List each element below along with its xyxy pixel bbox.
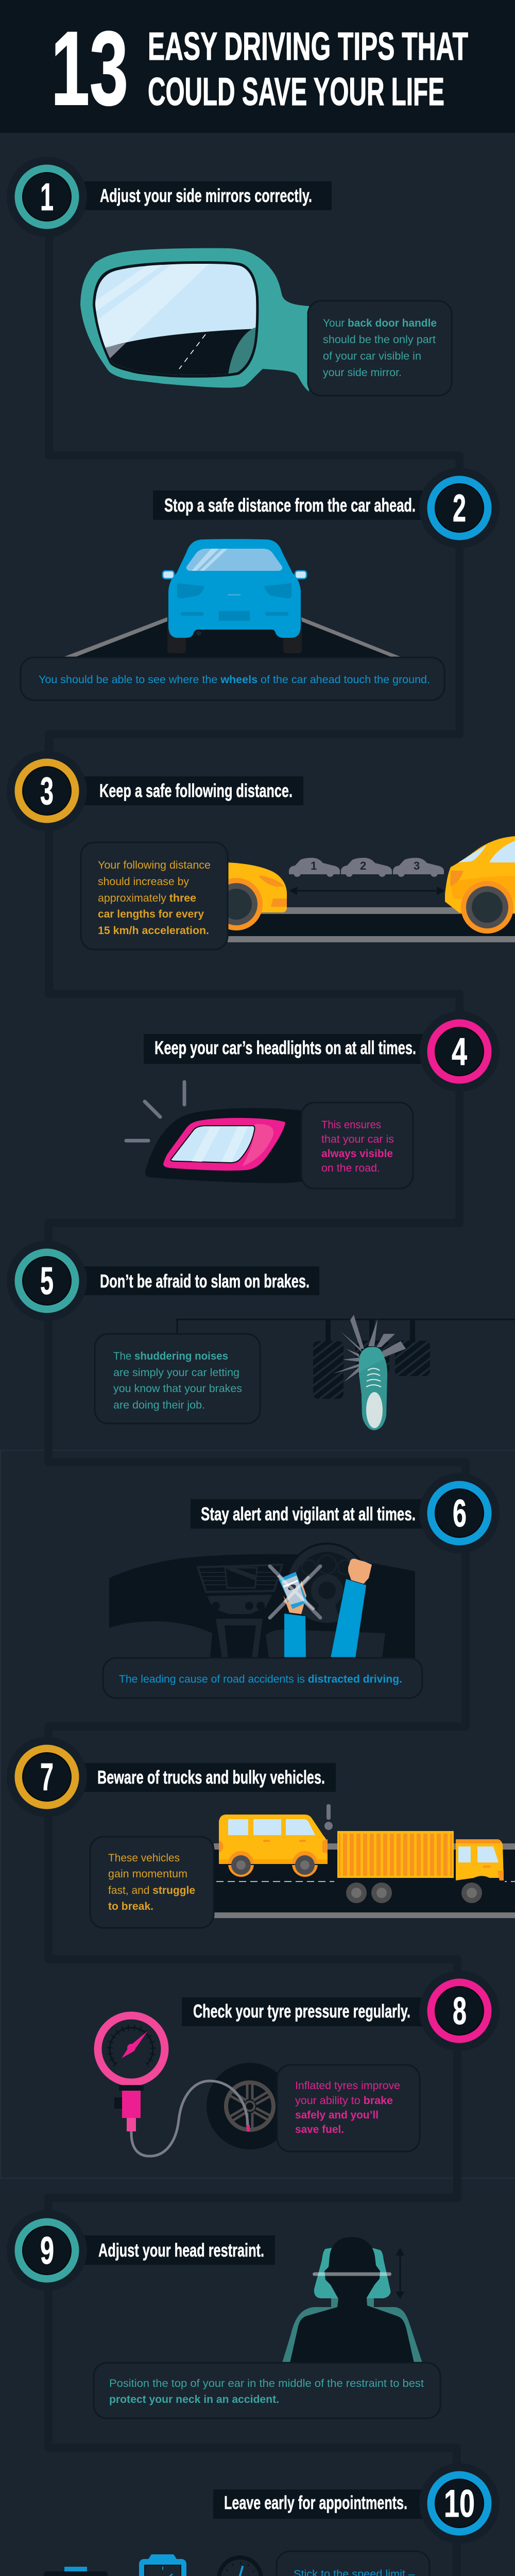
callout: headlights [301,1103,413,1189]
callout: headlights: This ensures [321,1119,381,1131]
tip 1 heading: 1 [40,175,54,218]
callout: trucks: These vehicles [108,1852,180,1864]
callout: wheels: You should be able to see where the wheels of the car ahead touch the ground. [39,674,430,686]
tip 7 heading [7,1737,336,1817]
road with van and truck [214,1804,515,1918]
callout: mirror tip: of your car visible in [323,350,421,362]
tip 6 heading: 6 [453,1492,467,1535]
callout: mirror tip: should be the only part [323,334,436,346]
callout: head restraint [94,2363,440,2418]
grey car 1 [289,858,340,877]
tip 1 heading [7,157,332,237]
callout: tyre pressure: save fuel. [295,2124,344,2136]
tip 7 heading: 7 [40,1755,54,1799]
tip 5 heading: Don’t be afraid to slam on brakes. [100,1270,310,1292]
grey car 1: 1 [311,859,317,872]
callout: brakes: are simply your car letting [113,1367,239,1379]
tip 8 heading: 8 [453,1989,467,2032]
road under car [62,617,402,657]
callout: trucks: gain momentum [108,1868,187,1880]
tip 1 heading: Adjust your side mirrors correctly. [100,185,312,206]
tip 2 heading: 2 [453,486,466,530]
front yellow car [445,836,515,934]
dashboard illustration [109,1543,415,1658]
van [219,1815,328,1877]
grey car 3: 3 [414,859,420,872]
tip 8 heading [182,1971,500,2051]
tip 10 heading [213,2463,500,2544]
callout: brakes: The shuddering noises [113,1350,228,1362]
tip 7 heading: Beware of trucks and bulky vehicles. [97,1767,325,1788]
tip 6 heading: Stay alert and vigilant at all times. [201,1503,416,1524]
wrist watch [139,2554,186,2576]
rear yellow car [210,862,287,930]
tip 2 heading: Stop a safe distance from the car ahead. [164,495,416,516]
callout: tyre pressure [277,2065,420,2151]
callout: trucks [90,1837,214,1928]
callout: headlights: on the road. [321,1162,380,1174]
callout: wheels [21,657,444,700]
blue car rear view [163,539,306,653]
grey car 2 [341,858,392,877]
tip 4 heading [144,1011,500,1092]
tip 3 heading: Keep a safe following distance. [99,780,293,801]
table clock [217,2555,263,2576]
callout: head restraint: protect your neck in an accident. [109,2394,279,2405]
side mirror illustration [80,248,309,392]
grey car 2: 2 [360,859,366,872]
distance arrow [289,887,445,895]
callout: following distance: Your following distance [98,859,211,871]
tip 8 heading: Check your tyre pressure regularly. [193,2001,410,2022]
title banner: 13 [51,10,128,127]
tip 3 heading: 3 [40,769,54,812]
following distance road scene [210,836,515,942]
tip 5 heading [7,1241,319,1321]
callout: tyre pressure: your ability to brake [295,2095,393,2107]
callout: mirror tip [308,301,452,396]
callout: distracted driving: The leading cause of road accidents is distracted driving. [119,1673,402,1685]
tip 4 heading: Keep your car’s headlights on at all times. [154,1037,416,1058]
grey car 3 [393,858,444,877]
callout: brakes: you know that your brakes [113,1383,242,1395]
headlight illustration [126,1082,304,1183]
callout: tyre pressure: Inflated tyres improve [295,2080,400,2092]
callout: mirror tip: Your back door handle [323,317,437,329]
tip 5 heading: 5 [40,1259,54,1302]
callout: following distance: approximately three [98,892,196,904]
callout: trucks: fast, and struggle [108,1885,195,1896]
tip 3 heading [7,751,303,831]
tip 9 heading: Adjust your head restraint. [98,2240,264,2261]
callout: trucks: to break. [108,1901,153,1912]
digital alarm clock [44,2567,108,2576]
callout: distracted driving [103,1658,422,1698]
tip 2 heading [153,468,500,548]
tyre with spokes [207,2063,293,2149]
callout: brakes [95,1334,260,1423]
head restraint silhouette [282,2237,422,2363]
tip 9 heading: 9 [40,2229,54,2272]
callout: mirror tip: your side mirror. [323,367,402,379]
road path connecting the tips [47,197,466,2576]
tip 10 heading: 10 [444,2482,475,2525]
pedals and shoe illustration [177,1315,515,1430]
title banner [0,0,515,133]
truck [334,1831,505,1903]
tip 4 heading: 4 [452,1030,467,1073]
callout: headlights: that your car is [321,1133,394,1145]
tip 10 heading: Leave early for appointments. [224,2492,407,2513]
callout: following distance: 15 km/h acceleration. [98,925,209,937]
pressure gauge with hose [98,2015,250,2156]
faint panel lines [0,1450,515,2576]
callout: head restraint: Position the top of your ear in the middle of the restraint to best [109,2378,424,2389]
callout: following distance [81,842,228,950]
warning mark [324,1804,333,1830]
callout: following distance: car lengths for every [98,908,204,920]
shelf with three clocks [0,2554,278,2576]
callout: leave early [277,2551,430,2576]
callout: following distance: should increase by [98,876,190,888]
tip 6 heading [191,1473,500,1553]
callout: tyre pressure: safely and you’ll [295,2109,379,2121]
tip 9 heading [7,2210,275,2291]
callout: brakes: are doing their job. [113,1399,205,1411]
callout: headlights: always visible [321,1148,393,1160]
